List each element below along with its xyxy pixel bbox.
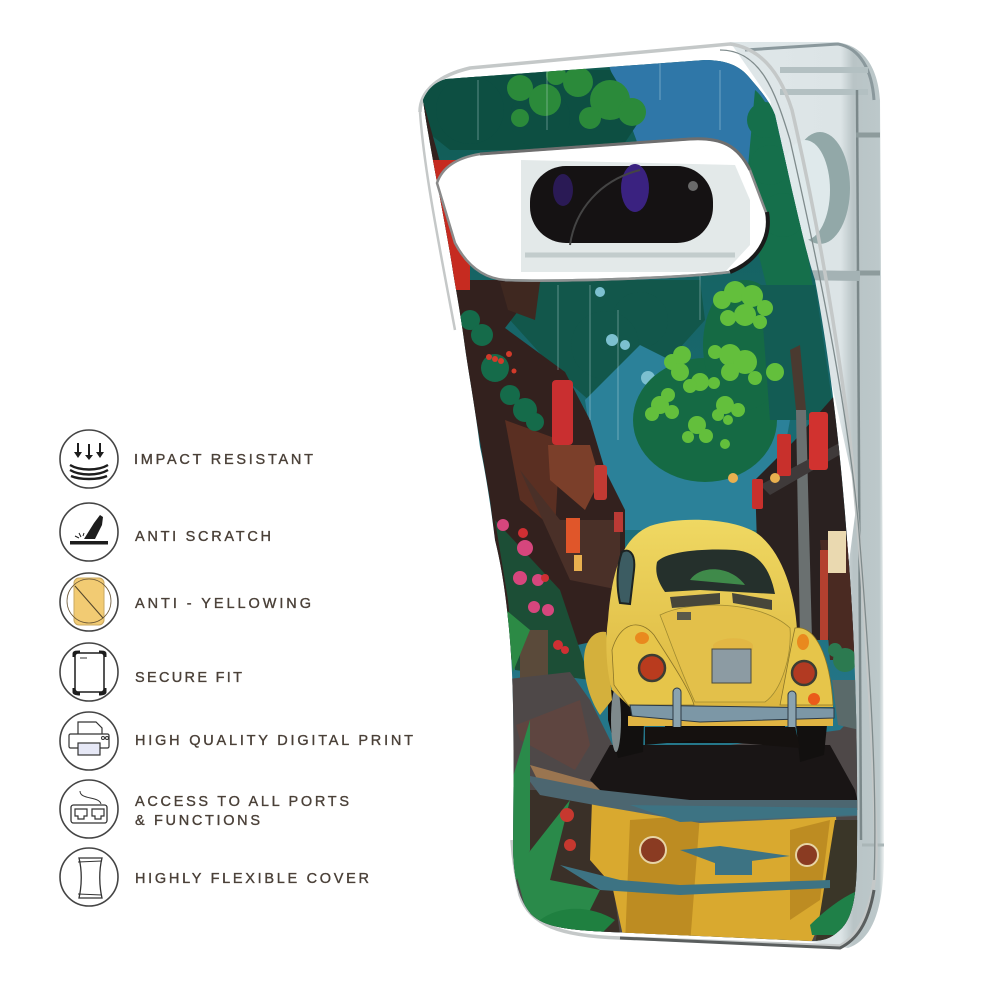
engine lid xyxy=(660,605,790,702)
island bottom rim xyxy=(505,272,730,281)
bright green leaf clusters xyxy=(645,281,784,449)
dark lower left ground xyxy=(530,790,620,935)
red patch beside camera xyxy=(432,160,470,290)
camera bar metal xyxy=(521,160,750,272)
feature: ports and functions: & FUNCTIONS xyxy=(135,813,260,829)
hanging lanterns right xyxy=(752,412,846,573)
feature: digital print xyxy=(60,712,413,770)
green leaves at top xyxy=(507,65,646,129)
right tree by camera xyxy=(747,90,813,285)
rear right fender xyxy=(780,628,833,705)
lens window xyxy=(530,164,713,243)
feature: secure fit: SECURE FIT xyxy=(135,670,242,686)
reflected tail lights xyxy=(640,837,818,866)
left wheel hub xyxy=(611,688,621,752)
feature: digital print: HIGH QUALITY DIGITAL PRINT xyxy=(135,733,413,749)
rain streaks xyxy=(478,60,720,440)
puddle blue bands xyxy=(525,775,857,895)
wet road xyxy=(512,672,858,941)
feature: impact resistant: IMPACT RESISTANT xyxy=(134,452,313,468)
lower canopy xyxy=(510,280,705,398)
warm street lights xyxy=(574,473,780,571)
pink flowers xyxy=(495,519,590,680)
feature: ports and functions: ACCESS TO ALL PORTS xyxy=(135,794,349,810)
under car shadow xyxy=(645,727,800,748)
right plants xyxy=(828,643,857,672)
feature: impact resistant xyxy=(60,430,313,488)
car body xyxy=(606,520,833,707)
left building xyxy=(420,90,625,660)
lens arcs xyxy=(570,170,640,245)
artwork background xyxy=(410,50,870,950)
phone body behind case xyxy=(730,42,884,948)
right building xyxy=(755,345,860,660)
red berries xyxy=(486,351,516,374)
right tail light xyxy=(792,661,816,685)
feature list xyxy=(60,430,413,906)
chrome bumper xyxy=(630,705,834,722)
side window xyxy=(618,551,634,604)
feature: anti yellowing xyxy=(60,573,311,631)
window interior green xyxy=(690,569,745,585)
feature: secure fit xyxy=(60,643,242,701)
planter and leaves xyxy=(506,610,548,680)
vine foliage xyxy=(460,310,544,431)
lower right plants xyxy=(810,892,855,935)
left tail light xyxy=(639,655,665,681)
lower left plants xyxy=(512,720,615,935)
hanging lanterns left xyxy=(552,380,623,553)
bumper shadow xyxy=(628,716,833,726)
distant blue haze xyxy=(585,345,790,530)
dark canopy upper left xyxy=(420,70,640,150)
feature: anti yellowing: ANTI - YELLOWING xyxy=(135,596,311,612)
plate light hood xyxy=(713,638,753,650)
upper blue sky xyxy=(605,55,790,180)
rear left fender far xyxy=(584,632,612,715)
blue leaf gaps xyxy=(595,287,655,385)
yellow car xyxy=(584,520,834,762)
printed artwork: rainy street with yellow car xyxy=(410,50,870,960)
reflection darker body xyxy=(625,815,830,945)
road bricks xyxy=(516,700,600,790)
camera cutout panel xyxy=(437,139,768,281)
case edge outline xyxy=(420,44,876,948)
engine vents xyxy=(670,593,772,620)
camera rim lower dark xyxy=(730,212,768,272)
red reflected flowers xyxy=(560,808,576,851)
wheels xyxy=(608,690,827,745)
rear window xyxy=(656,550,775,594)
rear left fender xyxy=(612,625,694,705)
bumper guards xyxy=(673,688,796,731)
yellow reflection xyxy=(590,800,840,945)
dark tree base xyxy=(633,280,835,482)
island lower bar xyxy=(525,252,735,258)
orange indicators xyxy=(635,632,820,705)
reflection dark surround xyxy=(816,820,858,941)
feature: anti scratch: ANTI SCRATCH xyxy=(135,529,271,545)
feature: flexible cover: HIGHLY FLEXIBLE COVER xyxy=(135,871,369,887)
feature: anti scratch xyxy=(60,503,271,561)
black wet patch under car xyxy=(590,745,860,810)
feature: flexible cover xyxy=(60,848,369,906)
right sidewalk xyxy=(832,680,856,729)
license plate xyxy=(712,649,751,683)
feature: ports and functions xyxy=(60,780,349,838)
camera rim top xyxy=(480,139,750,170)
